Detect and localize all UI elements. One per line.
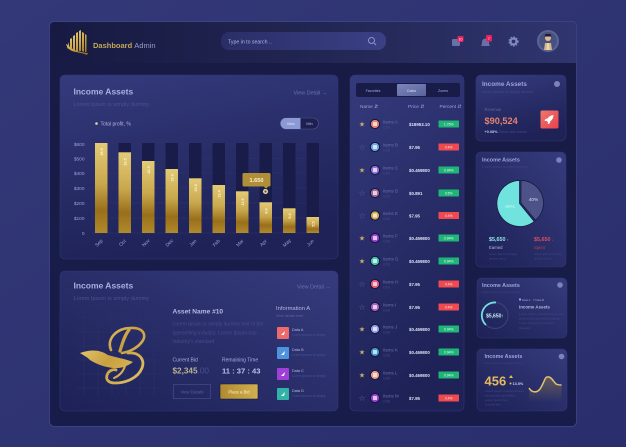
row: item k: $0.469800	[409, 350, 430, 355]
bar chart: 12.4	[217, 189, 221, 198]
sparkline	[529, 377, 562, 402]
row: item d	[359, 188, 459, 198]
bar chart: Dec	[165, 238, 175, 248]
information list: View details here	[276, 314, 303, 318]
row: item m: ★	[359, 394, 365, 402]
bar chart: 5.5	[311, 221, 315, 227]
row: item h: ★	[359, 280, 365, 288]
current bid: $2,345.00	[172, 366, 209, 376]
bar chart: Mar	[235, 238, 246, 248]
info dot	[554, 81, 560, 87]
row: item c	[359, 165, 459, 176]
icon: rocket	[540, 110, 558, 128]
asset name: Asset Name #10	[172, 308, 223, 316]
icon: bell with badge: 7	[488, 37, 490, 41]
information list	[276, 306, 326, 400]
row: item j: 0.94%	[444, 328, 454, 332]
data d	[277, 388, 326, 400]
row: item c: USD	[383, 172, 391, 176]
row: item d: USD	[383, 194, 391, 198]
bar chart: Sep	[94, 238, 105, 248]
asset description: industry's standard	[172, 339, 215, 345]
bar chart: 15.9	[170, 174, 174, 182]
search box	[221, 32, 386, 50]
bar chart	[74, 142, 320, 249]
row: item g: USD	[383, 262, 391, 266]
data c: Data C	[292, 369, 304, 373]
info dot	[556, 157, 562, 163]
table header	[360, 104, 461, 110]
button: view details	[174, 384, 210, 398]
panel: sparkline stat: Lorem Ipsum is simply dummy	[484, 361, 523, 365]
row: item k: USD	[383, 354, 391, 358]
icon: mail with badge	[452, 36, 464, 46]
panel: coin list	[350, 75, 464, 411]
data b: Data B	[292, 348, 304, 352]
button: place a bid	[220, 384, 258, 399]
logo grid	[78, 312, 162, 396]
bar chart: 11.5	[241, 198, 245, 206]
asset description: typesetting industry. Lorem Ipsum has	[172, 330, 257, 336]
pie chart: 60%	[505, 204, 516, 210]
current bid	[172, 358, 209, 376]
panel: asset details	[60, 271, 338, 411]
heading: Income Assets	[484, 354, 522, 360]
row: item h: USD	[383, 286, 391, 290]
row: item f: ★	[359, 234, 365, 242]
row: item a	[359, 119, 459, 130]
toggle: max min: Min	[306, 121, 313, 126]
pie chart	[497, 180, 543, 226]
row: item d: Items D	[383, 188, 398, 194]
data a: Data A	[292, 328, 304, 332]
current bid: Current Bid	[172, 358, 198, 364]
panel: sparkline stat	[477, 349, 567, 411]
data d: Data D	[292, 389, 304, 393]
revenue value: +0.08% Since last month	[484, 130, 527, 134]
row: item h: 0.4%	[445, 282, 453, 286]
information list: Information A	[276, 306, 310, 312]
panel: progress ring: Lorem Ipsum is simply dummy	[482, 290, 520, 294]
row: item b	[359, 142, 459, 152]
icon: settings gear	[509, 37, 518, 46]
bar chart: $300	[74, 186, 85, 192]
row: item a: Items A	[383, 120, 398, 124]
ring description: printing and typesetting industry	[519, 316, 560, 320]
row: item m: Items M	[383, 394, 399, 398]
remaining time: 11 : 37 : 43	[222, 366, 260, 376]
ring description: standard	[519, 326, 531, 330]
data b: Lorem Ipsum is simply	[292, 353, 326, 357]
row: item l: 0.94%	[444, 374, 454, 378]
row: item h	[359, 279, 459, 290]
bar chart: 18.9	[100, 148, 104, 156]
bar chart: May	[282, 238, 293, 249]
panel heading: Income Assets	[74, 86, 133, 96]
ring description: Income Assets	[519, 304, 550, 310]
row: item j: Items J	[383, 324, 397, 330]
pie chart: 40%	[529, 197, 539, 203]
row: item l	[359, 370, 459, 380]
tabs	[356, 83, 460, 97]
row: item g: ★	[359, 258, 365, 266]
header bar	[50, 22, 576, 63]
row: item d: ★	[359, 190, 365, 198]
earned stat: Lorem Ipsum is simply	[489, 252, 517, 256]
row: item e: $7.95	[409, 213, 421, 218]
row: item f: $0.469800	[409, 236, 430, 241]
earned stat: $5,650 ↑	[489, 237, 509, 243]
asset description: Lorem Ipsum is simply dummy text of the	[172, 322, 264, 328]
button: view details: View Details	[181, 390, 203, 394]
bar chart: Apr	[259, 238, 269, 248]
row: item b: USD	[383, 148, 391, 152]
logo icon	[66, 30, 88, 55]
row: item a: 1.76%	[444, 122, 454, 126]
toggle: max min	[280, 118, 318, 129]
row: item m: $7.95	[409, 396, 421, 401]
row: item l: Items L	[383, 370, 398, 376]
row: item k: 0.94%	[444, 350, 454, 354]
panel: revenue: Lorem Ipsum is simply dummy	[482, 90, 533, 94]
bar chart: Nov	[141, 238, 152, 248]
bar chart: 8.9	[264, 208, 268, 214]
row: item l: ★	[359, 372, 365, 380]
legend: total profit: Total profit, %	[100, 122, 131, 128]
spent stat: Spent	[534, 245, 546, 250]
chart tooltip: 1.650	[250, 178, 264, 184]
bar chart: 0	[82, 231, 85, 237]
row: item h: $7.95	[409, 282, 421, 287]
data a: Lorem Ipsum is simply	[292, 333, 326, 337]
panel: pie chart	[476, 152, 566, 267]
panel: pie chart: Lorem Ipsum is simply dummy	[482, 165, 528, 169]
ring description: Lorem Ipsum is simply dummy text	[519, 312, 564, 316]
row: item j	[359, 324, 459, 334]
info dot	[559, 354, 564, 359]
progress ring: $5,650↑	[486, 314, 504, 320]
stat description: Lorem Ipsum has	[485, 398, 508, 402]
bar chart: Oct	[118, 238, 128, 248]
revenue value	[484, 107, 527, 134]
spent stat: dummy text of	[534, 256, 552, 260]
row: item d: $0.891	[409, 191, 423, 196]
row: item f: USD	[383, 240, 391, 244]
row: item j: USD	[383, 330, 391, 334]
stat description	[485, 389, 525, 406]
row: item g: Items G	[383, 256, 399, 262]
data c: Lorem Ipsum is simply	[292, 374, 326, 378]
row: item i: USD	[383, 308, 391, 312]
bar chart: $200	[74, 201, 85, 207]
row: item i: 0.4%	[445, 306, 453, 310]
bar chart: Jun	[306, 238, 316, 248]
row: item g: $0.469800	[409, 259, 430, 264]
table header: Percent ⇵	[440, 104, 461, 110]
row: item k: ★	[359, 348, 365, 356]
row: item j: $0.469800	[409, 327, 430, 332]
icon: mail with badge: 10	[459, 38, 462, 42]
row: item a: USD	[383, 126, 391, 130]
table header: Price ⇵	[408, 104, 424, 110]
row: item l: $0.469800	[409, 373, 430, 378]
bar chart: Jan	[188, 238, 198, 248]
chart tooltip	[242, 173, 270, 194]
row: item d: 0.5%	[445, 192, 453, 196]
ring legend	[519, 298, 544, 302]
tabs: Coins	[407, 89, 416, 93]
bar chart: $600	[74, 142, 85, 148]
panel heading: Income Assets	[74, 280, 133, 290]
row: item c: $0.469800	[409, 168, 430, 173]
bar chart: Feb	[212, 238, 222, 248]
row: item i: $7.95	[409, 305, 421, 310]
row: item j: ★	[359, 326, 365, 334]
ring description: Lorem Ipsum has industry's	[519, 321, 555, 325]
earned stat: dummy text of	[489, 256, 507, 260]
row: item i: Items I	[383, 302, 396, 308]
asset logo: gold letter B with leaf	[80, 328, 144, 383]
heading: Income Assets	[482, 81, 527, 88]
row: item e	[359, 211, 459, 221]
panel: revenue	[476, 75, 566, 141]
toggle: max min: Max	[287, 121, 295, 126]
stat description: industry text	[485, 402, 501, 406]
bar chart: $400	[74, 171, 85, 177]
panel subtitle: Lorem Ipsum is simply dummy	[74, 296, 149, 302]
view detail link: View Detail →	[294, 90, 327, 96]
stat description: printing and typesetting	[485, 394, 515, 398]
heading: Income Assets	[482, 283, 520, 289]
ring description	[519, 304, 564, 330]
icon: bell with badge	[481, 35, 492, 46]
tabs: Favorites	[366, 89, 381, 93]
row: item i: ★	[359, 304, 365, 312]
bar chart: 16.5	[123, 158, 127, 166]
row: item f: 0.94%	[444, 236, 454, 240]
row: item k: Items K	[383, 348, 398, 352]
earned stat: Earned	[489, 245, 503, 250]
big number: 456	[484, 374, 506, 388]
row: item h: Items H	[383, 280, 398, 284]
panel: progress ring	[477, 278, 567, 338]
view detail link: View Detail →	[297, 284, 331, 290]
row: item k	[359, 347, 459, 358]
row: item g: 0.94%	[444, 260, 454, 264]
bar chart: $500	[74, 156, 85, 162]
info dot	[557, 282, 563, 288]
row: item f: Items F	[383, 234, 398, 238]
bar chart: 16.9	[147, 166, 151, 174]
table header: Name ⇵	[360, 104, 378, 110]
row: item b: Items B	[383, 142, 398, 148]
asset description	[172, 322, 264, 345]
row: item c: ★	[359, 166, 365, 174]
spent stat: $5,650 ↓	[534, 237, 554, 243]
avatar	[537, 30, 559, 52]
panel: income assets bar chart	[60, 75, 338, 259]
row: item a: $18953.10	[409, 122, 430, 127]
logo wordmark: Dashboard Admin	[93, 41, 156, 50]
row: item e: USD	[383, 217, 391, 221]
bar chart: $100	[74, 216, 85, 222]
heading: Income Assets	[482, 158, 520, 164]
row: item e: Items E	[383, 211, 398, 216]
row: item b: $7.95	[409, 145, 421, 150]
ring legend: Data B	[536, 298, 544, 302]
tabs: Zones	[438, 89, 448, 93]
search box: Type in to search ..	[228, 40, 272, 46]
panel subtitle: Lorem Ipsum is simply dummy	[74, 102, 149, 108]
earned stat	[489, 237, 517, 260]
remaining time: Remaining Time	[222, 358, 258, 364]
row: item m: 0.4%	[445, 396, 453, 400]
revenue value: $90,524	[484, 116, 519, 126]
row: item l: USD	[383, 376, 391, 380]
remaining time	[222, 358, 260, 376]
data a	[277, 327, 326, 339]
row: item e: 0.4%	[445, 214, 453, 218]
row: item i	[359, 302, 459, 312]
spent stat: Lorem Ipsum is simply	[534, 252, 562, 256]
button: place a bid: Place a Bid	[228, 390, 250, 394]
row: item f	[359, 233, 459, 244]
row: item m: USD	[383, 400, 391, 404]
row: item a: ★	[359, 120, 365, 128]
ring legend: Data A	[522, 298, 531, 302]
row: item c: Items C	[383, 166, 398, 170]
row: item b: ★	[359, 144, 365, 152]
revenue value: Revenue	[484, 107, 502, 112]
bar chart: 13.9	[194, 184, 198, 192]
data c	[277, 368, 326, 380]
row: item c: 0.94%	[444, 168, 454, 172]
row: item b: 0.4%	[445, 146, 453, 150]
dashboard frame	[50, 22, 576, 426]
bar chart: 6.4	[288, 212, 292, 219]
spent stat	[534, 237, 562, 260]
data b	[277, 347, 326, 359]
row: item g	[359, 256, 459, 266]
row: item e: ★	[359, 212, 365, 220]
change indicators: 13.5%	[512, 382, 524, 386]
stat description: Lorem Ipsum is simply dummy	[485, 389, 525, 393]
row: item m	[359, 393, 459, 404]
data d: Lorem Ipsum is simply	[292, 394, 326, 398]
